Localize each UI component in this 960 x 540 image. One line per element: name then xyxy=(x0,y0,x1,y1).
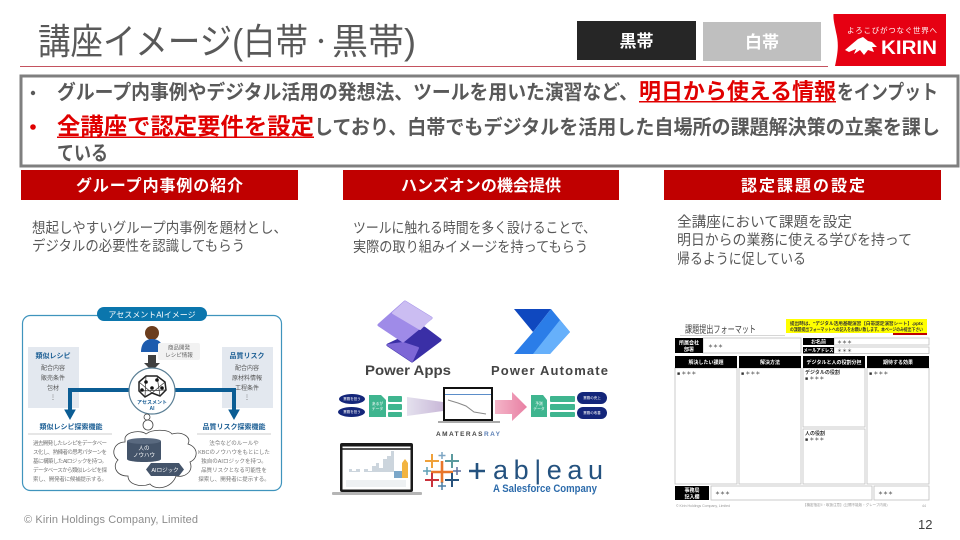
diagram: Amateras Ray flow xyxy=(338,387,607,438)
form: task submission format: ■ ＊＊＊ xyxy=(677,371,696,377)
form: task submission format: ＊＊＊ xyxy=(708,344,723,350)
diagram: assessment AI: 品質リスクとなる可能性を xyxy=(201,466,267,474)
form: task submission format: 所属会社 xyxy=(679,340,699,346)
diagram: assessment AI: AIロジック xyxy=(151,467,179,474)
heading: hands-on xyxy=(343,170,619,200)
text: hands-on description: 実際の取り組みイメージを持ってもらう xyxy=(353,239,588,256)
diagram: Amateras Ray flow: データ xyxy=(533,406,545,411)
form: task submission format: © Kirin Holdings Company, Limited xyxy=(676,504,730,508)
diagram: assessment AI: 配合内容 xyxy=(41,364,65,372)
form: task submission format: 部署 xyxy=(684,346,694,353)
form: task submission format: お名前 xyxy=(811,338,826,346)
diagram: assessment AI: 包材 xyxy=(47,384,59,392)
summary bullet 1: グループ内事例やデジタル活用の発想法、ツールを用いた演習など、 xyxy=(57,80,638,104)
title: 講座イメージ(白帯 xyxy=(38,21,308,62)
heading: case studies: グループ内事例の紹介 xyxy=(76,176,243,195)
diagram: assessment AI: 商品開発 xyxy=(168,344,190,352)
footer: copyright: © Kirin Holdings Company, Limited xyxy=(24,514,198,526)
diagram: assessment AI: 類似レシピ探索機能 xyxy=(40,422,102,431)
panel: case studies xyxy=(21,170,298,490)
diagram: Amateras Ray flow: 業務の売上 xyxy=(583,395,601,400)
badge: black belt: 黒帯 xyxy=(620,32,654,51)
form: task submission format: メールアドレス xyxy=(804,348,834,354)
diagram: assessment AI: アセスメントAIイメージ xyxy=(108,310,196,320)
diagram: assessment AI: 過去開発したレシピをデータベー xyxy=(33,439,107,447)
diagram: assessment AI: AI xyxy=(150,406,155,412)
summary bullet 2: しており、白帯でもデジタルを活用した自場所の課題解決策の立案を課し xyxy=(314,115,940,139)
label: Power Automate: Power Automate xyxy=(491,363,608,378)
form: task submission format xyxy=(675,319,929,508)
diagram: assessment AI: 探索し、開発者に提示する。 xyxy=(198,475,270,483)
diagram: assessment AI: 品質リスク探索機能 xyxy=(202,422,266,431)
form: task submission format: ■ ＊＊＊ xyxy=(805,437,824,443)
form: task submission format: ■ ＊＊＊ xyxy=(741,371,760,377)
icon: Power Apps xyxy=(379,302,440,361)
diagram: assessment AI: 基に構築したAIロジックを持つ。 xyxy=(33,457,107,465)
logo: Tableau: A Salesforce Company xyxy=(493,483,598,495)
form: task submission format: ＊＊＊ xyxy=(837,340,852,346)
form: task submission format: ＊＊＊ xyxy=(715,491,730,497)
title: 黒帯) xyxy=(332,21,416,62)
badge: white belt: 白帯 xyxy=(745,33,779,52)
diagram: assessment AI: レシピ情報 xyxy=(165,351,193,359)
logo: Tableau xyxy=(423,452,603,495)
text: certification description: 帰るように促している xyxy=(677,250,806,268)
diagram: assessment AI xyxy=(22,307,282,490)
diagram: Amateras Ray flow: AMATERASRAY xyxy=(436,431,501,438)
summary bullet 2: ている xyxy=(57,143,108,165)
form: task submission format: ■ ＊＊＊ xyxy=(869,371,888,377)
form: task submission format: の課題提出フォーマットへの記入をお願い致します。本ページのみ提出下さい xyxy=(790,326,923,333)
text: case studies description: 想起しやすいグループ内事例を題材とし、 xyxy=(32,220,287,237)
text: certification description xyxy=(677,214,912,268)
heading: case studies xyxy=(21,170,298,200)
text: case studies description xyxy=(32,220,287,255)
badge: black belt xyxy=(577,21,696,60)
logo: Tableau: ab|eau xyxy=(493,455,603,485)
summary bullet 2: 全講座で認定要件を設定 xyxy=(57,113,314,139)
diagram: assessment AI: データベースから類似レシピを探 xyxy=(33,466,107,474)
form: task submission format: ＊＊＊ xyxy=(837,348,852,354)
summary box xyxy=(21,76,958,166)
heading: certification tasks xyxy=(664,170,941,200)
panel: certification tasks xyxy=(664,170,941,508)
panel: hands-on xyxy=(332,170,619,495)
diagram: Amateras Ray flow: データ xyxy=(372,406,383,411)
logo: Kirin xyxy=(833,14,946,66)
text: certification description: 明日からの業務に使える学びを持って xyxy=(677,232,912,249)
diagram: assessment AI: 独自のAIロジックを持つ。 xyxy=(201,457,267,465)
form: task submission format: 解決したい課題 xyxy=(688,359,724,366)
text: hands-on description xyxy=(353,219,596,256)
diagram: Amateras Ray flow: 予測 xyxy=(535,401,543,406)
summary bullet 1: 明日から使える情報 xyxy=(639,79,836,104)
text: hands-on description: ツールに触れる時間を多く設けることで、 xyxy=(353,219,596,237)
diagram: assessment AI: アセスメント xyxy=(137,400,167,406)
diagram: assessment AI: 人の xyxy=(138,445,150,452)
badge: white belt xyxy=(703,22,821,61)
form: task submission format: 44 xyxy=(922,504,926,508)
form: task submission format: 解決方法 xyxy=(760,359,780,366)
heading: hands-on: ハンズオンの機会提供 xyxy=(401,176,561,195)
form: task submission format: 記入欄 xyxy=(684,494,700,500)
form: task submission format: 【機密指定II・取扱注意】(公開不能版・グレープ内用) xyxy=(803,502,888,507)
footer: page number: 12 xyxy=(918,517,932,532)
diagram: assessment AI: 工程条件 xyxy=(235,384,259,392)
diagram: Amateras Ray flow: 業務を担う xyxy=(343,396,361,401)
icon: laptop dashboard xyxy=(332,443,422,495)
heading: certification tasks: 認定課題の設定 xyxy=(741,177,865,195)
diagram: assessment AI: ス化し、熟練者の思考パターンを xyxy=(33,448,107,456)
form: task submission format: デジタルの役割 xyxy=(805,369,840,376)
logo: Kirin: KIRIN xyxy=(881,38,937,59)
diagram: assessment AI: ノウハウ xyxy=(133,451,155,459)
summary bullet 2 xyxy=(30,113,940,165)
label: Power Apps: Power Apps xyxy=(365,362,451,378)
summary bullet 1: をインプット xyxy=(837,81,938,104)
diagram: assessment AI: 類似レシピ xyxy=(36,351,70,360)
diagram: assessment AI: 品質リスク xyxy=(230,351,264,360)
icon: Power Automate xyxy=(514,309,570,354)
diagram: assessment AI: 販売条件 xyxy=(41,374,65,382)
form: task submission format: デジタルと人の役割分担 xyxy=(807,359,861,366)
diagram: Amateras Ray flow: あるが xyxy=(372,401,383,406)
diagram: Amateras Ray flow: 業務を担う xyxy=(343,409,361,414)
logo: Kirin: よろこびがつなぐ世界へ xyxy=(847,25,938,35)
diagram: assessment AI: 原材料情報 xyxy=(232,374,262,382)
title xyxy=(20,21,828,67)
text: certification description: 全講座において課題を設定 xyxy=(677,214,852,231)
diagram: assessment AI: 索し、開発者に候補提示する。 xyxy=(33,475,107,483)
diagram: assessment AI: 法令などのルールや xyxy=(209,439,259,447)
text: case studies description: デジタルの必要性を認識してもらう xyxy=(32,237,245,255)
diagram: assessment AI: 配合内容 xyxy=(235,364,259,372)
form: task submission format: 期待する効果 xyxy=(883,359,913,366)
form: task submission format: ■ ＊＊＊ xyxy=(805,376,824,382)
form: task submission format: 事務局 xyxy=(684,487,700,494)
form: task submission format: 課題提出フォーマット xyxy=(685,324,756,336)
form: task submission format: 人の役割 xyxy=(805,430,825,437)
diagram: assessment AI: KBCのノウハウをもとにした xyxy=(198,448,270,456)
form: task submission format: 提出時は、"デジタル活用基礎演習【白帯認定演習シート】.pptx xyxy=(790,320,924,327)
diagram: assessment AI: ⋮ xyxy=(244,395,250,401)
diagram: assessment AI: ⋮ xyxy=(50,395,56,401)
diagram: Amateras Ray flow: 業務の改善 xyxy=(583,410,601,415)
summary bullet 1 xyxy=(31,79,938,104)
form: task submission format: ＊＊＊ xyxy=(878,491,893,497)
